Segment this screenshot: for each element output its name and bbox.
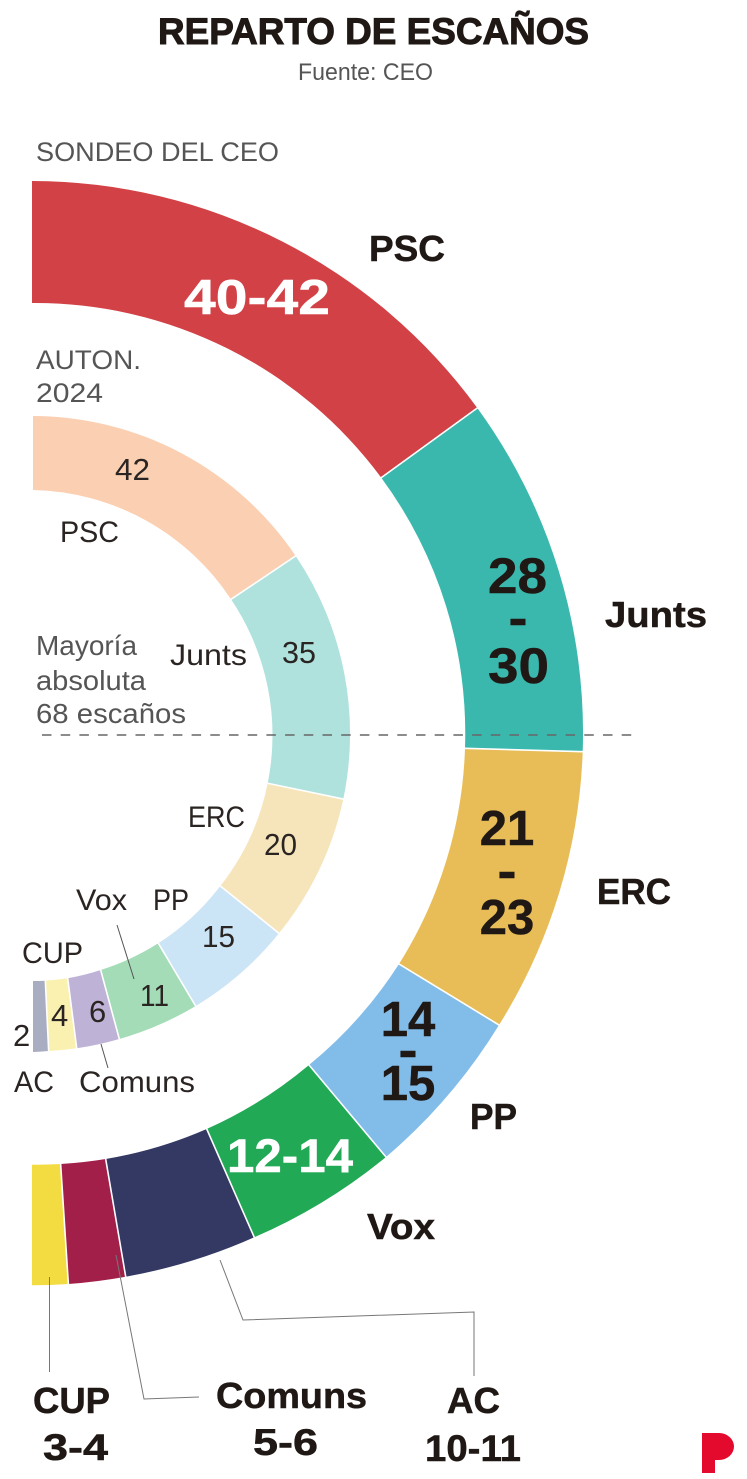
outer ring party names: Vox [367, 1206, 435, 1247]
label: Comuns: Comuns [216, 1375, 367, 1416]
segment: ERC 2024 [220, 783, 343, 933]
heading: 2024 election: 2024 [36, 378, 103, 408]
heading: 2024 election: AUTON. [36, 345, 141, 375]
value: ERC: - [498, 843, 516, 899]
leader line: AC [220, 1260, 474, 1376]
inner ring values [13, 452, 316, 1053]
segment: PSC 2024 [33, 416, 296, 599]
segment: PP [309, 964, 499, 1157]
majority label: Mayoría [36, 630, 137, 661]
leader line: Comuns [116, 1255, 199, 1399]
label: Comuns: 5-6 [253, 1422, 318, 1463]
inner ring party names: Comuns [79, 1066, 195, 1099]
segment: Junts 2024 [231, 556, 350, 799]
label: AC: AC [447, 1380, 500, 1421]
outer ring values [184, 271, 549, 1182]
inner ring values: 42 [115, 452, 150, 487]
majority line [42, 734, 632, 736]
inner ring values: 20 [264, 827, 297, 862]
outer ring party names: PP [470, 1096, 517, 1137]
value: PP [381, 993, 435, 1111]
majority label: absoluta [36, 665, 146, 696]
chart: outer ring, CEO poll [32, 181, 583, 1285]
heading: CEO poll: SONDEO DEL CEO [36, 137, 279, 167]
value: ERC: 23 [480, 891, 534, 945]
outer ring party names [367, 228, 707, 1247]
segment: PSC [32, 181, 477, 478]
value: PP: 15 [381, 1057, 435, 1111]
title: REPARTO DE ESCAÑOS [158, 10, 589, 52]
leader line: Comuns 2024 [101, 1044, 108, 1068]
logo [702, 1433, 734, 1473]
label: CUP: CUP [33, 1380, 110, 1421]
label: AC: 10-11 [425, 1428, 521, 1469]
segment: CUP 2024 [45, 978, 77, 1051]
value: Junts [488, 548, 549, 694]
value: PP: - [398, 1022, 418, 1078]
inner ring party names: Junts [170, 639, 247, 672]
inner ring party names: AC [14, 1066, 54, 1099]
majority label: 68 escaños [36, 698, 186, 729]
label: CUP: 3-4 [43, 1427, 109, 1468]
segment: Comuns 2024 [68, 970, 119, 1048]
segment: AC 2024 [33, 981, 49, 1052]
segment: Vox [207, 1065, 386, 1237]
value: Junts: 30 [488, 638, 549, 694]
leader line: CUP [48, 1277, 50, 1372]
inner ring values: 6 [89, 994, 106, 1029]
label: CUP [33, 1380, 110, 1468]
segment: ERC [399, 748, 583, 1025]
value: PSC: 40-42 [184, 271, 330, 325]
inner ring values: 2 [13, 1018, 30, 1053]
value: ERC: 21 [480, 802, 534, 856]
value: Junts: 28 [488, 548, 547, 604]
segment: CUP [32, 1164, 68, 1285]
inner ring party names: PP [153, 884, 189, 917]
majority label [36, 630, 186, 729]
outer ring party names: PSC [369, 228, 445, 269]
segment: Vox 2024 [101, 943, 196, 1039]
inner ring party names: Vox [76, 884, 127, 917]
segment: Junts [381, 408, 583, 752]
segment: PP 2024 [158, 886, 279, 1006]
outer ring party names: Junts [605, 594, 707, 635]
value: ERC [480, 802, 534, 945]
label: AC [425, 1380, 521, 1469]
segment: AC [106, 1129, 254, 1277]
label: Comuns [216, 1375, 367, 1463]
inner ring values: 15 [202, 919, 235, 954]
value: PP: 14 [381, 993, 435, 1047]
leader line: Vox 2024 [117, 925, 134, 979]
inner ring values: 4 [51, 998, 68, 1033]
value: Vox: 12-14 [227, 1129, 353, 1182]
inner ring party names: CUP [22, 937, 83, 970]
value: Junts: - [508, 590, 528, 646]
segment: Comuns [61, 1159, 126, 1284]
chart: inner ring, 2024 election [33, 416, 350, 1052]
source: Fuente: CEO [298, 59, 433, 86]
inner ring party names [14, 516, 247, 1099]
heading: 2024 election [36, 345, 141, 408]
inner ring party names: PSC [60, 516, 119, 549]
inner ring values: 11 [140, 978, 169, 1013]
outer ring party names: ERC [597, 871, 671, 912]
inner ring values: 35 [282, 635, 316, 670]
inner ring party names: ERC [188, 801, 245, 834]
